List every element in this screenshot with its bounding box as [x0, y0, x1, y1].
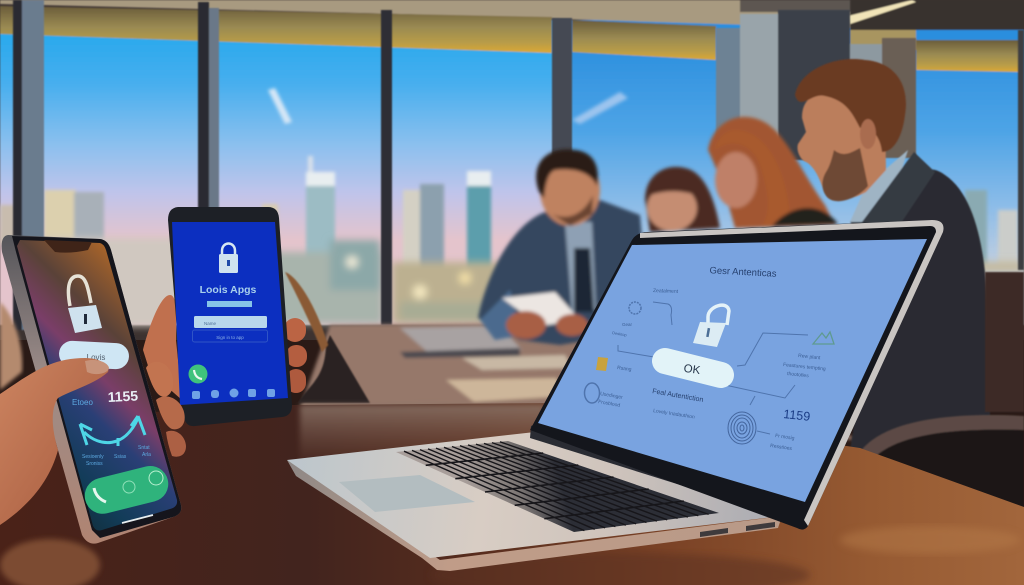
home bar [122, 515, 153, 523]
subtitle bar [207, 301, 252, 307]
lower city haze with bokeh [44, 238, 1024, 326]
screen labels: Rew plant [798, 353, 821, 361]
fingers on phone edge [146, 362, 186, 457]
left phone screen [17, 240, 177, 530]
background: office windows with city skyline [0, 0, 1024, 340]
person: woman with red hair [708, 117, 838, 228]
screen labels: thootofies [787, 371, 809, 379]
lock icon [68, 276, 102, 333]
foreground table surface [0, 403, 1024, 585]
small labels: Sntat [138, 445, 150, 451]
screen lock icon [693, 305, 729, 347]
small labels [82, 445, 151, 467]
fingerprint icon [728, 412, 756, 444]
right phone screen [172, 222, 288, 405]
right phone body [168, 207, 292, 426]
thumbnail [85, 360, 109, 374]
phone title: Loois Apgs [200, 284, 257, 296]
distant skyline buildings [0, 88, 1018, 280]
screen labels: Gear [622, 322, 633, 327]
left phone body [2, 235, 181, 544]
login pill: Lovis [87, 353, 105, 362]
label: Etoeo [72, 398, 93, 407]
screen labels [598, 288, 826, 452]
screen labels: Zeatalment [653, 288, 679, 295]
person: man in profile, dark suit [795, 59, 992, 490]
house icon [813, 332, 834, 344]
lock icon [219, 244, 238, 273]
code number: 1155 [107, 387, 139, 405]
screen labels: Feal Autentiction [652, 388, 704, 404]
screen title: Gesr Antenticas [709, 265, 777, 280]
hinge band [530, 423, 806, 523]
input field: Name [204, 321, 217, 326]
screen labels: Usedinger [600, 391, 623, 401]
person: man with document [478, 149, 650, 345]
screen labels: Resstioes [770, 443, 793, 452]
chair behind the table [285, 272, 370, 403]
curved arrow [80, 416, 145, 446]
holding hand and thumb [0, 358, 108, 525]
left chair edge [0, 302, 22, 390]
keyboard [396, 441, 719, 532]
notch [44, 240, 92, 253]
screen labels: Fr mosig [775, 433, 795, 442]
small labels: Arla [142, 452, 151, 458]
conference table, far section [300, 322, 860, 440]
input field [194, 316, 267, 328]
screen labels: Rsang [617, 365, 632, 373]
laptop lid [530, 220, 944, 530]
nav icons [192, 388, 275, 399]
round icon [584, 383, 600, 403]
laptop [287, 220, 944, 571]
small labels: Sesioenly [82, 454, 104, 460]
gear icon [629, 302, 641, 314]
outlined field: Sign in to app [216, 335, 244, 340]
left phone with hand [0, 235, 186, 544]
OK button [665, 361, 721, 377]
small labels: Ssias [114, 454, 127, 460]
outlined field [192, 330, 268, 342]
yellow badge icon [596, 357, 608, 371]
laptop base [287, 432, 782, 571]
screen labels: Desktop [612, 330, 628, 338]
right side chair [858, 272, 1024, 510]
screen labels: Frosblood [598, 399, 621, 409]
right phone held in hand [143, 207, 307, 426]
green action bar [81, 462, 172, 518]
window mullions and columns [13, 0, 1024, 330]
OK button: OK [683, 363, 701, 377]
green call button [188, 364, 208, 384]
screen labels: Feastures tempting [783, 362, 826, 372]
screen labels: Lovely Inadauthion [653, 408, 695, 421]
trackpad [339, 475, 475, 512]
laptop screen [538, 239, 927, 502]
small labels: Sroniss [86, 461, 103, 467]
login pill [58, 340, 130, 370]
hinge band: CARNOUS [625, 459, 656, 474]
person: woman in the middle [645, 167, 720, 232]
connector lines [618, 302, 808, 434]
code number: 1159 [783, 407, 811, 424]
hand behind right phone [143, 295, 307, 400]
